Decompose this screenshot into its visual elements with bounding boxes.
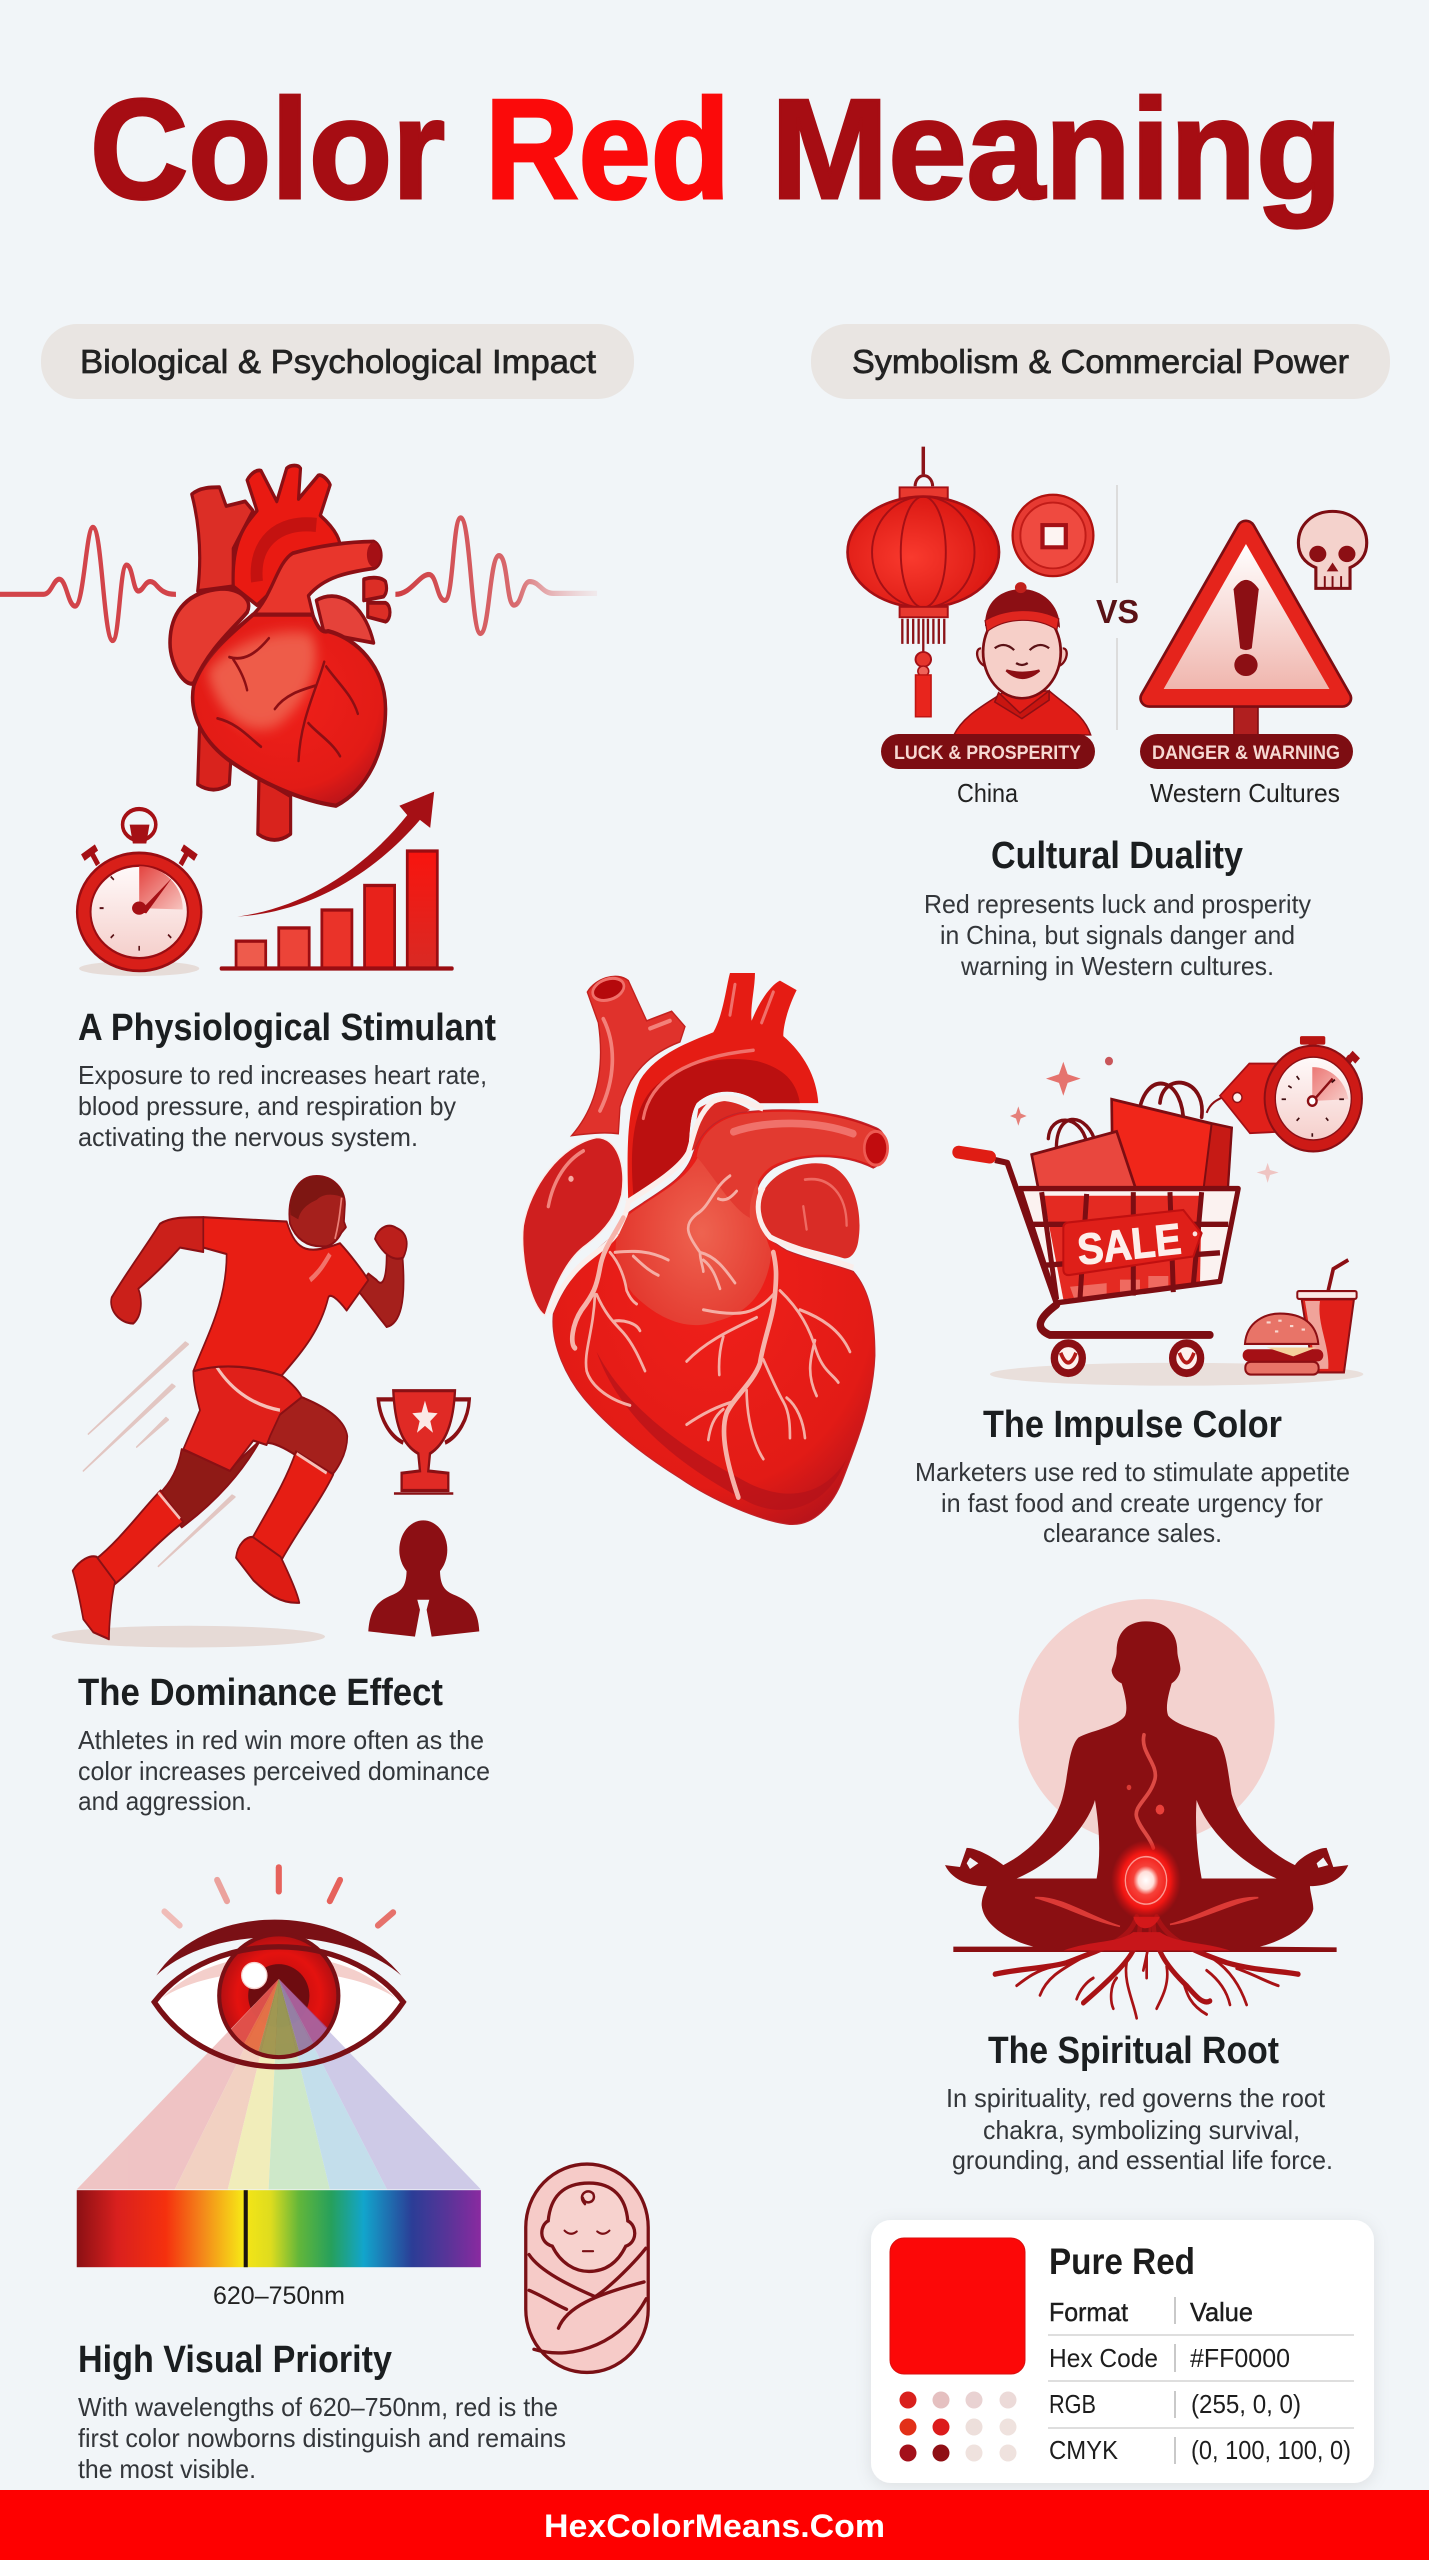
colour values table: Hex Code [1049, 2343, 1158, 2373]
colour swatch [890, 2238, 1025, 2374]
section header: biological and psychological impact [41, 324, 634, 399]
text block: in China, but signals danger and [940, 920, 1295, 950]
text block [78, 2392, 566, 2484]
text block: blood pressure, and respiration by [78, 1091, 456, 1121]
text block [924, 889, 1311, 981]
text block: first color nowborns distinguish and remains [78, 2423, 566, 2453]
icon: swaddled newborn [526, 2164, 648, 2372]
heading: Cultural Duality [991, 835, 1243, 877]
card title: Pure Red [1049, 2241, 1195, 2282]
text block: Red represents luck and prosperity [924, 889, 1311, 919]
text block: activating the nervous system. [78, 1122, 418, 1152]
divider and VS label: VS [1096, 593, 1139, 630]
text block: In spirituality, red governs the root [946, 2083, 1326, 2113]
heading: High Visual Priority [78, 2339, 392, 2381]
icon: price tag with stopwatch [1207, 1036, 1362, 1151]
heading: The Impulse Color [983, 1404, 1282, 1446]
colour values table: RGB [1049, 2389, 1096, 2419]
illustration: shopping cart with bags and sale tag [958, 1057, 1363, 1386]
icon: dominant person silhouette [368, 1520, 479, 1637]
colour values table: (0, 100, 100, 0) [1191, 2435, 1351, 2465]
title: Meaning [771, 70, 1342, 229]
text block [946, 2083, 1333, 2175]
text block: chakra, symbolizing survival, [983, 2115, 1300, 2145]
label: wavelength range: 620–750nm [213, 2282, 345, 2310]
text block: Athletes in red win more often as the [78, 1725, 484, 1755]
illustration: meditating figure with glowing root chakra and roots [945, 1599, 1348, 2018]
section header: biological and psychological impact: Biological & Psychological Impact [80, 343, 596, 380]
label: china: China [957, 778, 1018, 808]
card background [871, 2220, 1374, 2483]
label: western cultures: Western Cultures [1150, 778, 1340, 808]
text block [78, 1725, 490, 1816]
panel: pure red colour card [871, 2220, 1374, 2483]
swatch dot palette [900, 2392, 1016, 2462]
text block: clearance sales. [1043, 1518, 1222, 1548]
badge: luck and prosperity [881, 734, 1095, 769]
badge: danger and warning: DANGER & WARNING [1152, 743, 1340, 764]
badge: danger and warning [1140, 734, 1353, 769]
section header: symbolism and commercial power [811, 324, 1390, 399]
illustration: eye with light spectrum [77, 1867, 481, 2267]
text block: color increases perceived dominance [78, 1756, 490, 1786]
illustration: shopping cart with bags and sale tag: SALE [1075, 1214, 1183, 1274]
text block: the most visible. [78, 2454, 256, 2484]
text block: and aggression. [78, 1786, 252, 1816]
illustration: running athlete [52, 1176, 407, 1647]
heading: A Physiological Stimulant [78, 1007, 496, 1049]
icon: stopwatch [77, 809, 201, 976]
panel: high visual priority [77, 1867, 648, 2484]
text block: grounding, and essential life force. [952, 2145, 1333, 2175]
section header: symbolism and commercial power: Symbolism & Commercial Power [852, 343, 1349, 380]
heading: The Dominance Effect [78, 1672, 443, 1714]
text block: in fast food and create urgency for [941, 1488, 1323, 1518]
text block: With wavelengths of 620–750nm, red is the [78, 2392, 558, 2422]
panel: the impulse color [915, 1036, 1363, 1548]
icon: trophy [378, 1391, 469, 1493]
text block [78, 1060, 487, 1152]
title [90, 70, 1342, 229]
text block: Exposure to red increases heart rate, [78, 1060, 487, 1090]
panel: the spiritual root [945, 1599, 1348, 2175]
colour values table: (255, 0, 0) [1191, 2389, 1301, 2419]
text block: warning in Western cultures. [960, 951, 1274, 981]
title: Red [485, 70, 730, 229]
icon: anatomical heart with heartbeat lines [0, 465, 597, 840]
colour values table: Format [1049, 2297, 1129, 2327]
central anatomical heart [523, 973, 888, 1524]
title: Color [90, 70, 445, 229]
colour values table: Value [1190, 2297, 1253, 2327]
badge: luck and prosperity: LUCK & PROSPERITY [894, 743, 1081, 764]
text block [915, 1457, 1350, 1548]
colour values table: #FF0000 [1190, 2343, 1290, 2373]
icon: drink and burger [1243, 1260, 1357, 1375]
colour values table [1048, 2297, 1354, 2465]
footer banner [0, 2490, 1429, 2560]
heading: The Spiritual Root [988, 2030, 1279, 2072]
panel: the dominance effect [52, 1176, 490, 1816]
text block: Marketers use red to stimulate appetite [915, 1457, 1350, 1487]
footer banner: HexColorMeans.Com [544, 2508, 885, 2544]
panel: cultural duality [848, 447, 1367, 981]
illustration: western side with warning sign and skull [1149, 511, 1367, 736]
colour values table: CMYK [1049, 2435, 1119, 2465]
chart: rising bars with arrow [221, 792, 452, 969]
panel: a physiological stimulant [0, 465, 597, 1152]
illustration: china side with lantern, coin and smiling man [848, 447, 1093, 735]
